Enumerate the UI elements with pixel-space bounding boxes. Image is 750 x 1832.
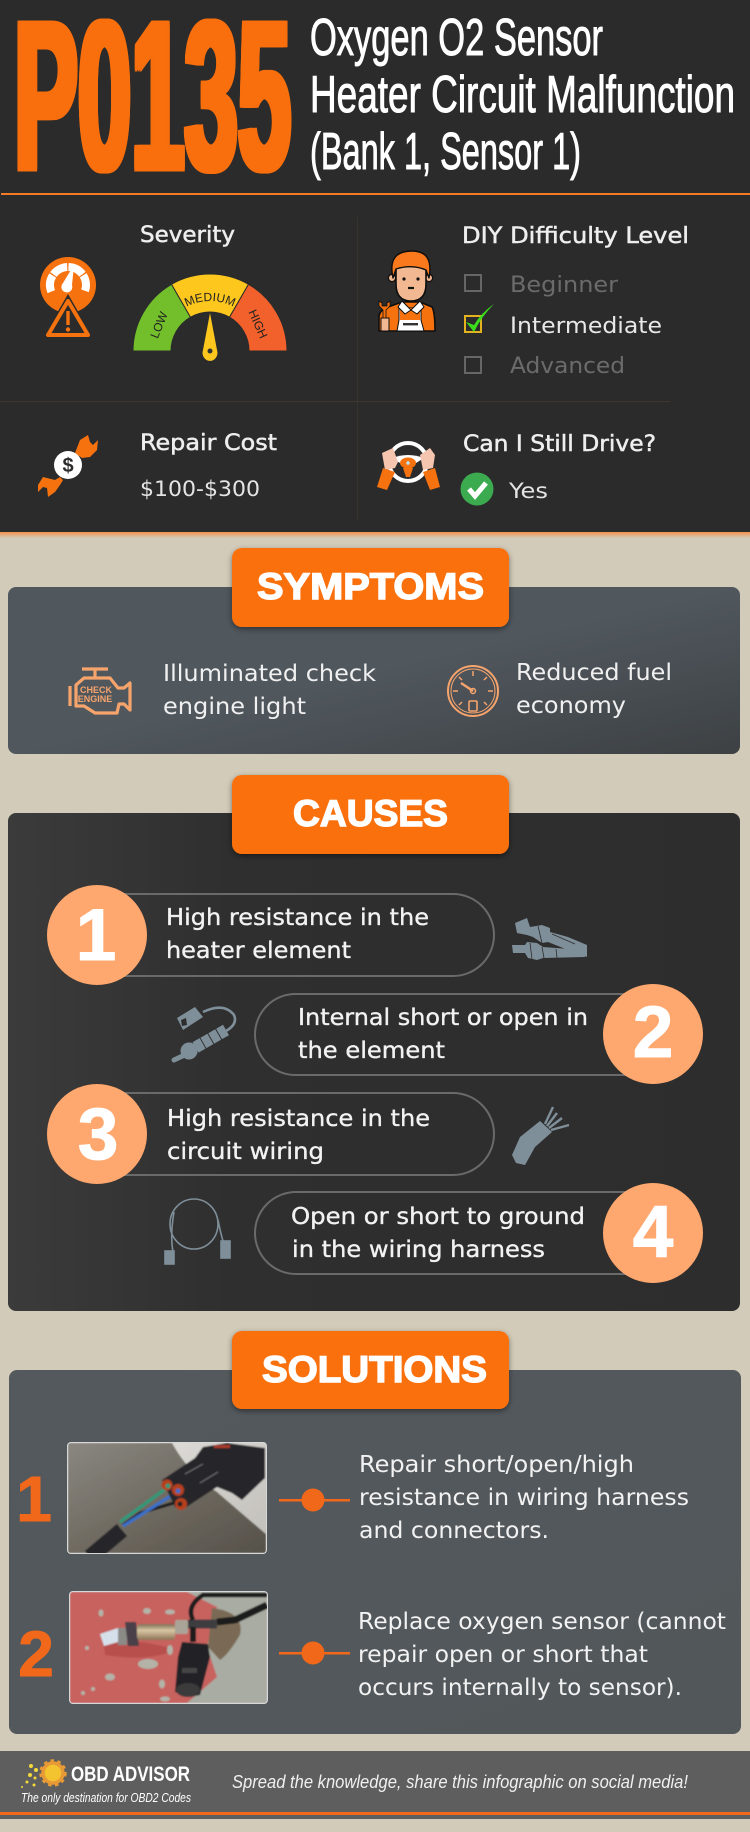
cause 2 <box>255 984 703 1084</box>
icon: wiring harness <box>165 1199 230 1264</box>
cause 3: High resistance in the <box>167 1106 430 1132</box>
symptom text: check engine light: engine light <box>163 694 306 720</box>
heading: solutions: SOLUTIONS <box>262 1349 487 1390</box>
icon: fuel gauge <box>448 666 498 716</box>
heading: Can I Still Drive?: Can I Still Drive? <box>463 432 656 457</box>
icon: OBD Advisor gear logo <box>21 1760 66 1788</box>
cause 4: Open or short to ground <box>291 1204 585 1230</box>
heading: DIY Difficulty Level: DIY Difficulty Level <box>462 224 689 249</box>
cause 1: 1 <box>76 895 116 976</box>
chart: severity gauge: MEDIUM <box>184 292 236 306</box>
symptom text: reduced fuel economy <box>516 660 672 719</box>
difficulty checklist: Beginner <box>510 273 619 298</box>
cause 4: in the wiring harness <box>292 1237 545 1263</box>
icon: sensor with plug <box>174 1007 235 1060</box>
number 2: 2 <box>18 1618 54 1690</box>
panel: causes <box>8 813 740 1311</box>
icon: stripped cable <box>512 1107 569 1165</box>
cause 1: High resistance in the <box>166 905 429 931</box>
cause 3: 3 <box>78 1094 118 1175</box>
panel: solutions <box>9 1370 741 1734</box>
cause 1 <box>47 885 494 985</box>
difficulty checklist: Intermediate <box>510 314 662 339</box>
solution text 2: repair open or short that <box>358 1642 648 1668</box>
icon: sensors pair <box>512 918 587 960</box>
difficulty checklist <box>465 273 662 379</box>
heading: solutions <box>232 1331 509 1409</box>
share message: Spread the knowledge, share this infographic on social media! <box>232 1772 688 1792</box>
solution text 2: occurs internally to sensor). <box>358 1675 682 1701</box>
solution text 2 <box>358 1609 726 1701</box>
icon: check engine <box>70 669 130 713</box>
difficulty checklist: Advanced <box>510 354 625 379</box>
chart: severity gauge: LOW <box>147 309 171 340</box>
solution text 2: Replace oxygen sensor (cannot <box>358 1609 726 1635</box>
cause 1: heater element <box>166 938 351 964</box>
cause 2: the element <box>298 1038 445 1064</box>
icon: wrench with dollar: $ <box>62 455 74 477</box>
title: Oxygen O2 Sensor Heater Circuit Malfunction <box>310 9 735 181</box>
title: Oxygen O2 Sensor Heater Circuit Malfunction: Oxygen O2 Sensor <box>310 9 603 67</box>
heading: symptoms <box>232 548 509 627</box>
panel: symptoms <box>8 587 740 754</box>
cause 2: Internal short or open in <box>298 1005 588 1031</box>
connector 2 <box>279 1642 350 1664</box>
photo: wiring connector <box>67 1442 267 1557</box>
solution text 1: resistance in wiring harness <box>359 1485 689 1511</box>
icon: check engine: CHECK <box>80 685 112 695</box>
header divider <box>1 193 750 195</box>
photo: oxygen sensor <box>69 1591 268 1704</box>
solution text 1: Repair short/open/high <box>359 1452 634 1478</box>
solution text 1 <box>359 1452 689 1544</box>
icon: mechanic <box>379 251 435 331</box>
symptom text: check engine light <box>163 661 377 720</box>
heading: symptoms: SYMPTOMS <box>257 566 484 607</box>
cause 3 <box>47 1084 494 1184</box>
chart: severity gauge <box>134 274 286 361</box>
answer: Yes with check <box>460 472 548 506</box>
heading: causes: CAUSES <box>293 793 448 834</box>
footer <box>0 1751 750 1819</box>
cause 3: circuit wiring <box>167 1139 324 1165</box>
header panel background <box>0 0 750 538</box>
heading: Repair Cost: Repair Cost <box>140 431 277 456</box>
icon: steering wheel and hands <box>377 443 440 490</box>
symptom text: check engine light: Illuminated check <box>163 661 377 687</box>
title: Oxygen O2 Sensor Heater Circuit Malfunction: (Bank 1, Sensor 1) <box>310 123 581 181</box>
icon: severity gauge and warning <box>40 257 96 339</box>
repair cost value: $100-$300 <box>140 477 260 501</box>
icon: wrench with dollar <box>38 435 98 497</box>
brand name: OBD ADVISOR <box>71 1763 190 1786</box>
cause 2: 2 <box>633 992 673 1073</box>
cause 4: 4 <box>633 1192 674 1273</box>
tagline: The only destination for OBD2 Codes <box>21 1790 191 1805</box>
solution text 1: and connectors. <box>359 1518 549 1544</box>
symptom text: reduced fuel economy: Reduced fuel <box>516 660 672 686</box>
cause 4 <box>255 1183 703 1283</box>
connector 1 <box>279 1488 350 1512</box>
icon: check engine: ENGINE <box>78 694 112 704</box>
chart: severity gauge: HIGH <box>246 307 270 341</box>
grid dividers <box>0 217 670 520</box>
heading: Severity: Severity <box>140 223 235 248</box>
answer: Yes with check: Yes <box>508 479 548 503</box>
symptom text: reduced fuel economy: economy <box>516 693 626 719</box>
number 1: 1 <box>16 1463 52 1535</box>
heading: causes <box>232 775 509 854</box>
